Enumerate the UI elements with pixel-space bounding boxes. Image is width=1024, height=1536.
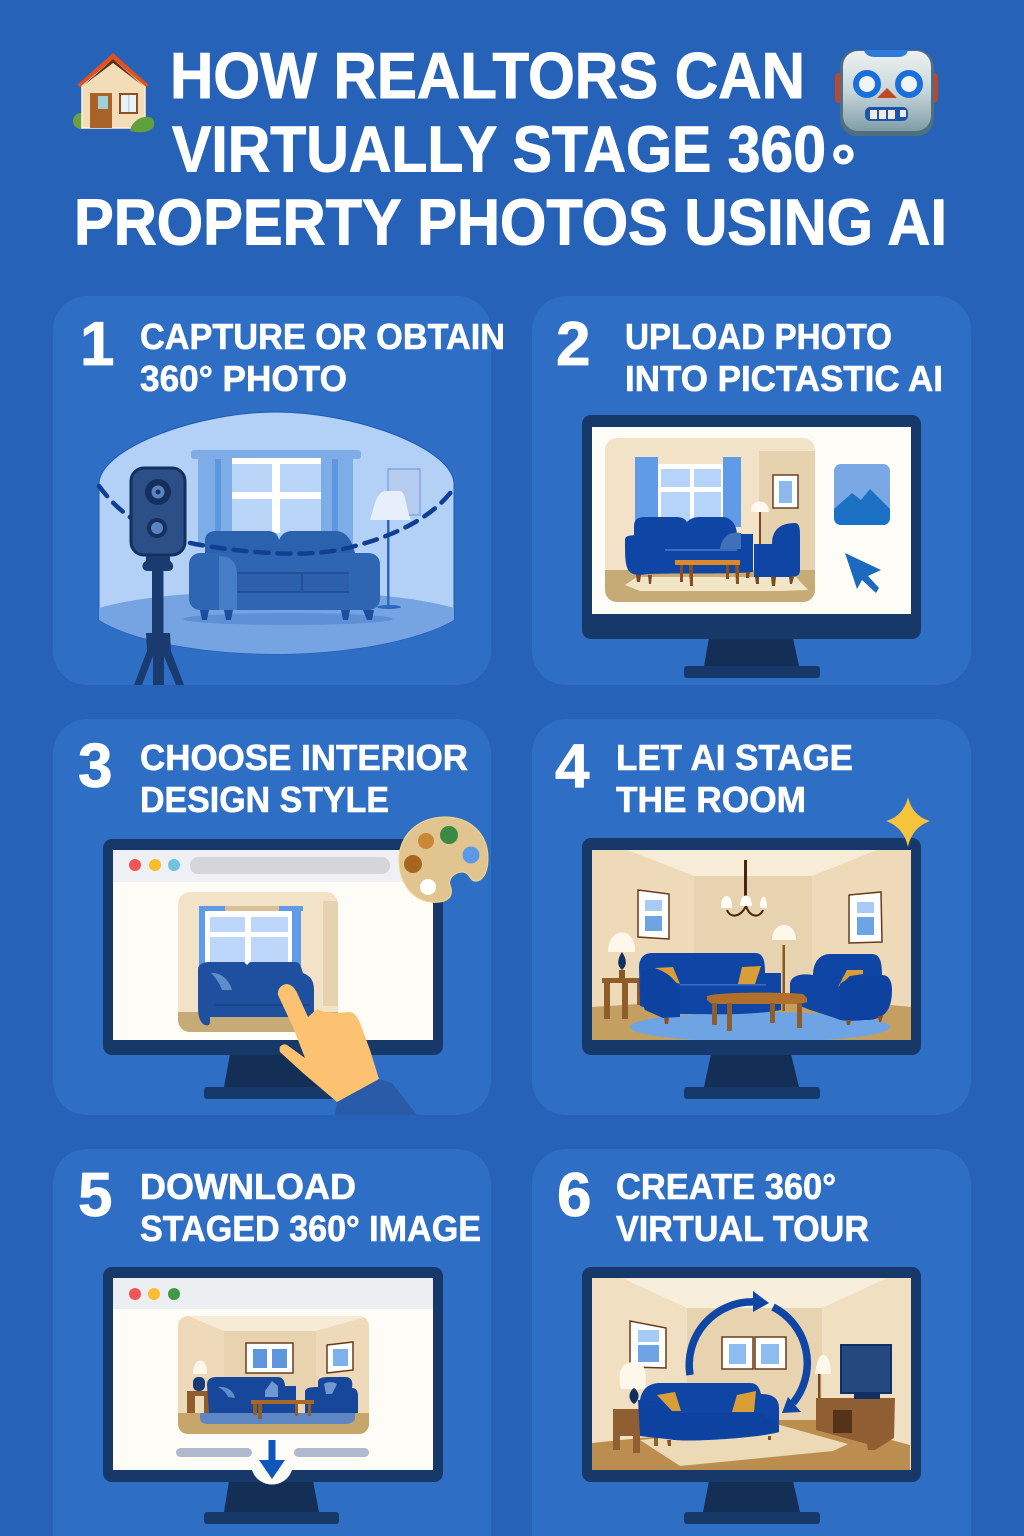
step number 5: 5 [78, 1161, 112, 1230]
monitor with style browser [103, 839, 443, 1099]
heading: step 4 [616, 737, 853, 820]
icon: palette [399, 817, 488, 902]
panel: step 5 download [53, 1149, 491, 1536]
step number 6: 6 [557, 1161, 591, 1230]
heading: step 1: 360° PHOTO [140, 358, 347, 399]
icon: robot [835, 50, 938, 136]
icon: pointing hand [278, 984, 417, 1115]
staged room scene [592, 850, 911, 1042]
placeholder bars [176, 1448, 369, 1457]
step number 3: 3 [78, 732, 112, 801]
title: PROPERTY PHOTOS USING AI [74, 186, 947, 258]
panel: step 4 AI stage [532, 719, 971, 1115]
title: VIRTUALLY STAGE 360 [172, 112, 826, 186]
room thumbnail [178, 892, 338, 1032]
illustration: 360 room dome [99, 412, 454, 685]
step number 1: 1 [80, 310, 114, 379]
heading: step 5 [140, 1166, 481, 1249]
icon: house [73, 53, 154, 132]
title: HOW REALTORS CAN [170, 39, 805, 112]
monitor with upload screen [582, 415, 921, 678]
heading: step 2: INTO PICTASTIC AI [625, 358, 943, 399]
title: ° [831, 133, 856, 202]
icon: image placeholder [834, 464, 890, 525]
heading: step 3: CHOOSE INTERIOR [140, 737, 468, 778]
monitor with download screen [103, 1267, 443, 1524]
heading: step 2: UPLOAD PHOTO [625, 316, 892, 357]
heading: step 4: LET AI STAGE [616, 737, 853, 778]
heading: step 6 [616, 1166, 869, 1249]
heading: step 3 [140, 737, 468, 820]
staged room thumbnail [178, 1316, 369, 1434]
step number 2: 2 [556, 310, 590, 379]
panel: step 3 style [53, 719, 491, 1115]
heading: step 5: DOWNLOAD [140, 1166, 356, 1207]
panel: step 6 virtual tour [532, 1149, 971, 1536]
icon: sparkle [886, 797, 930, 847]
step number 4: 4 [555, 732, 590, 801]
heading: step 6: VIRTUAL TOUR [616, 1208, 869, 1249]
title [74, 39, 947, 258]
panel: step 1 capture [53, 296, 505, 685]
heading: step 6: CREATE 360° [616, 1166, 836, 1207]
heading: step 2 [625, 316, 943, 399]
heading: step 1: CAPTURE OR OBTAIN [140, 316, 505, 357]
room photo thumbnail [605, 438, 815, 602]
panel: step 2 upload [532, 296, 971, 685]
heading: step 5: STAGED 360° IMAGE [140, 1208, 481, 1249]
icon: download arrow [252, 1440, 292, 1485]
monitor with staged room [582, 838, 921, 1099]
tour room scene [592, 1278, 911, 1470]
heading: step 1 [140, 316, 505, 399]
monitor with virtual tour room [582, 1267, 921, 1524]
heading: step 4: THE ROOM [616, 779, 806, 820]
icon: cursor arrow [845, 553, 881, 593]
rotation arrows [689, 1291, 807, 1413]
heading: step 3: DESIGN STYLE [140, 779, 389, 820]
